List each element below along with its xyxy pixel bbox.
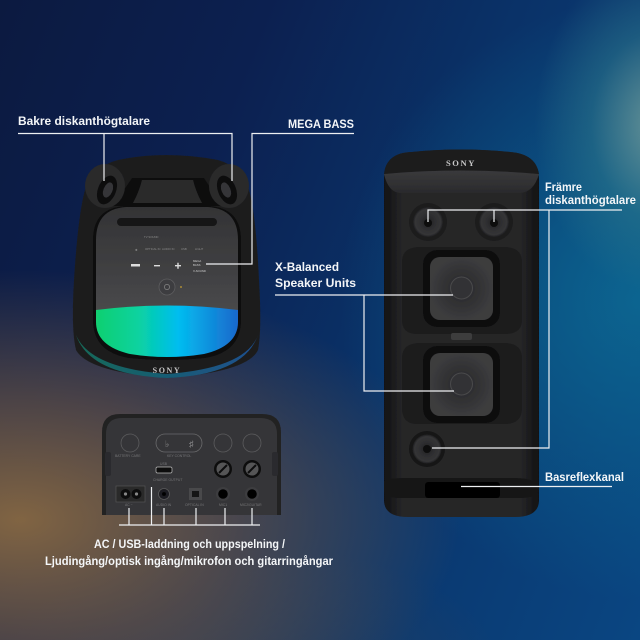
key control button: KEY CONTROL: [167, 454, 191, 458]
rear connector panel: [102, 414, 281, 515]
usb port: [153, 462, 182, 482]
top handle: [384, 150, 539, 174]
top-view speaker: [73, 155, 260, 378]
key control button: ♯: [189, 439, 194, 449]
callout: connectors: [45, 487, 334, 568]
control panel: [96, 207, 238, 312]
control buttons: LIGHT: [195, 247, 204, 251]
control buttons: [131, 235, 206, 295]
battery button: BATTERY CARE: [115, 454, 141, 458]
handle slot: [117, 218, 217, 226]
control buttons: OPTICAL IN: [145, 247, 160, 251]
light bar bezel: [93, 206, 241, 360]
callout: främre diskanthögtalare: Främre: [545, 182, 582, 194]
callout: x-balanced speaker units: Speaker Units: [275, 278, 356, 290]
front speaker: [384, 150, 539, 517]
ac socket: [116, 486, 145, 507]
callout: mega bass: [206, 119, 354, 264]
tweeter left: [409, 203, 447, 241]
speaker body: [73, 155, 260, 378]
audio in jack: [156, 488, 172, 507]
key control button: ♭: [165, 439, 169, 449]
key control button: [156, 434, 202, 458]
callout: bakre diskanthögtalare: Bakre diskanthögtalare: [18, 116, 150, 128]
callout: bakre diskanthögtalare: [18, 116, 232, 181]
logo: SONY: [153, 366, 181, 375]
side notches: [105, 452, 278, 476]
usb port: CHARGE OUTPUT: [153, 478, 182, 482]
carry handle: [112, 178, 222, 206]
lower woofer: [423, 346, 500, 423]
volume knobs: [214, 460, 261, 478]
callout: mega bass: MEGA BASS: [288, 119, 354, 131]
callout: främre diskanthögtalare: [428, 182, 636, 448]
callout: connectors: AC / USB-laddning och uppspelning /: [94, 539, 286, 551]
control buttons: MEGA: [193, 259, 201, 263]
callout: x-balanced speaker units: [275, 262, 454, 391]
control buttons: AUDIO IN: [162, 247, 174, 251]
control buttons: TV SOUND: [144, 235, 158, 239]
rim light: [76, 335, 258, 378]
light panel: [96, 306, 238, 357]
callout: x-balanced speaker units: X-Balanced: [275, 262, 339, 274]
control buttons: BASS: [193, 263, 201, 267]
rear tweeter right: [209, 164, 249, 208]
divider tab: [451, 333, 472, 340]
tweeter right: [475, 203, 513, 241]
battery button: [115, 434, 141, 458]
panel body: [102, 414, 281, 515]
callout: främre diskanthögtalare: diskanthögtalare: [545, 195, 636, 207]
lower speaker recess: [402, 343, 522, 424]
optical in port: [185, 488, 204, 507]
rear tweeter left: [85, 164, 125, 208]
bass reflex port: [384, 478, 539, 498]
speaker body: [384, 150, 539, 517]
callout: basreflexkanal: Basreflexkanal: [545, 472, 624, 484]
mic jacks: MIC1: [219, 503, 227, 507]
usb port: USB: [160, 462, 168, 466]
echo and guitar buttons: [214, 434, 261, 452]
control buttons: X-SOUND: [193, 269, 206, 273]
mic jacks: [216, 487, 262, 507]
ac socket: AC ~: [125, 503, 133, 507]
control buttons: ✱: [135, 248, 138, 252]
control buttons: USB: [181, 247, 187, 251]
logo: SONY: [446, 158, 476, 168]
audio in jack: AUDIO IN: [156, 503, 172, 507]
mic jacks: MIC2/GUITAR: [240, 503, 262, 507]
upper woofer: [423, 250, 500, 327]
callout: connectors: Ljudingång/optisk ingång/mikrofon och gitarringångar: [45, 556, 334, 568]
upper speaker recess: [402, 247, 522, 334]
lower tweeter: [409, 431, 445, 467]
optical in port: OPTICAL IN: [185, 503, 204, 507]
